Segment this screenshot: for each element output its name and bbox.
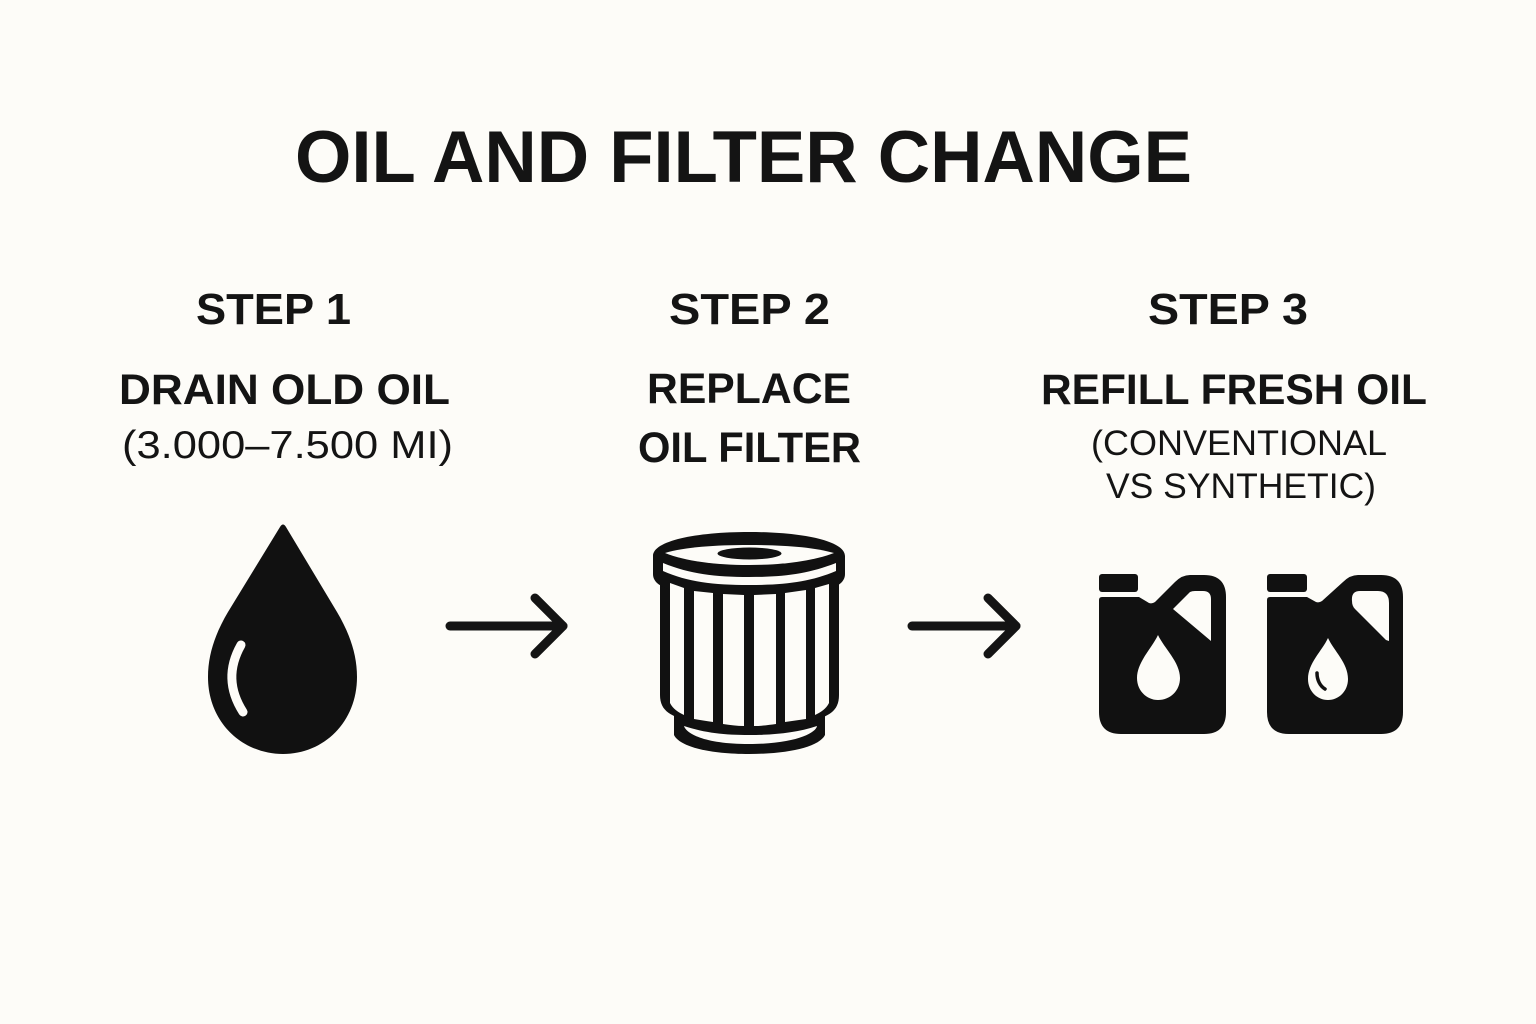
step 3 oil type note: VS SYNTHETIC) — [1106, 467, 1376, 506]
arrow: step 2 to step 3 — [912, 598, 1016, 654]
step 3 oil type note — [1091, 424, 1387, 506]
panel: step 1 — [119, 285, 453, 754]
icon: oil jug, conventional — [1099, 574, 1226, 734]
title: OIL AND FILTER CHANGE — [295, 117, 1192, 198]
step 3 heading: REFILL FRESH OIL — [1041, 366, 1427, 414]
step 1 label: STEP 1 — [196, 285, 351, 334]
step 3 label: STEP 3 — [1148, 285, 1308, 334]
icon: oil filter — [653, 532, 845, 754]
icon: oil jug, synthetic — [1267, 574, 1403, 734]
step 2 label: STEP 2 — [669, 285, 830, 334]
icon: oil drop — [208, 524, 357, 754]
step 2 heading — [638, 365, 861, 472]
step 2 heading: REPLACE — [647, 365, 851, 413]
arrow: step 1 to step 2 — [450, 598, 563, 654]
step 2 heading: OIL FILTER — [638, 424, 861, 472]
panel: step 2 — [638, 285, 861, 754]
panel: step 3 — [1041, 285, 1427, 734]
step 3 oil type note: (CONVENTIONAL — [1091, 424, 1387, 463]
step 1 mileage note: (3.000–7.500 MI) — [122, 424, 453, 467]
step 1 heading: DRAIN OLD OIL — [119, 366, 450, 414]
